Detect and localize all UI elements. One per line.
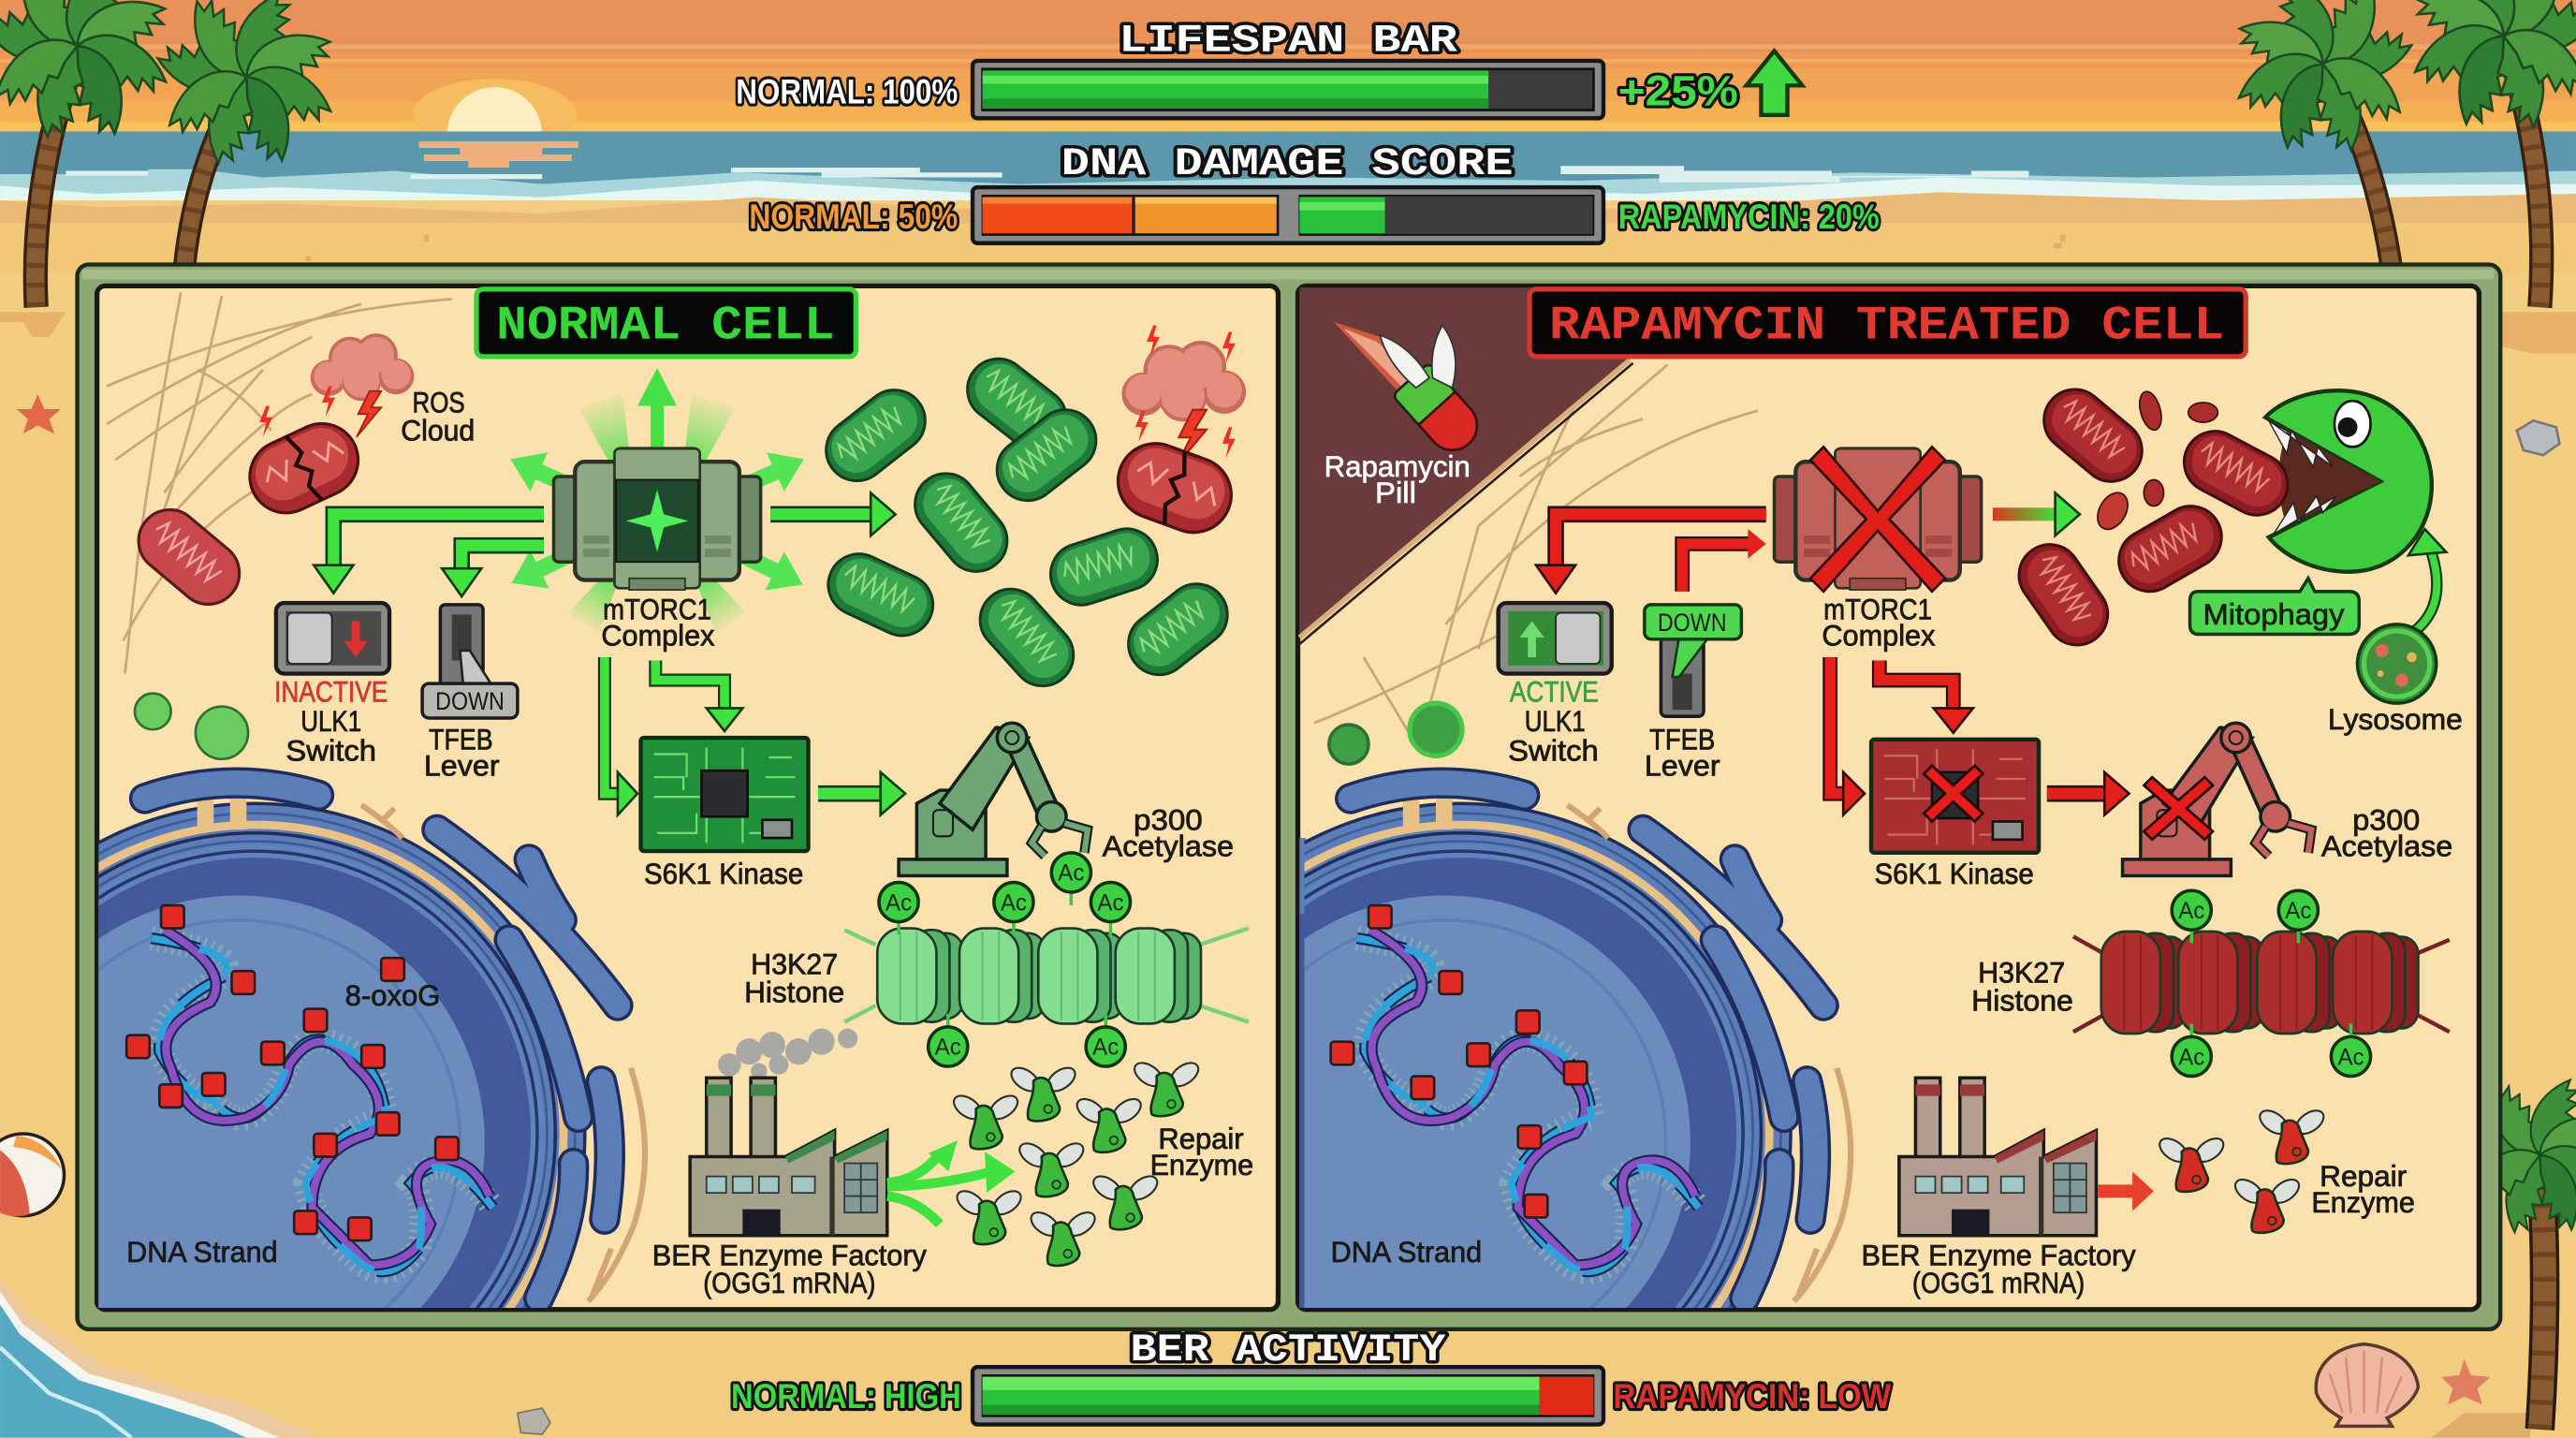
ULK1 switch inactive bbox=[276, 603, 389, 674]
repair enzyme label left: Enzyme bbox=[1150, 1148, 1253, 1181]
acetyl tags left bbox=[879, 853, 1131, 1066]
panel: normal cell bbox=[0, 286, 1278, 1438]
acetyl tags right bbox=[2172, 890, 2371, 1077]
ULK1 label right: ULK1 bbox=[1525, 704, 1586, 738]
ULK1 label left bbox=[274, 674, 388, 768]
ULK1 label right: ACTIVE bbox=[1510, 674, 1599, 708]
ULK1 label right bbox=[1508, 674, 1599, 768]
ULK1 switch active bbox=[1499, 603, 1612, 674]
HUD: lifespan bar bbox=[736, 18, 1802, 118]
factory smoke bbox=[718, 1029, 857, 1079]
palm tree right 2 bbox=[2407, 0, 2576, 307]
BER factory left bbox=[690, 1078, 887, 1236]
palm tree left 1 bbox=[0, 0, 175, 307]
ULK1 label left: Switch bbox=[285, 734, 376, 768]
BER gauge bbox=[973, 1367, 1603, 1425]
BER factory label right bbox=[1862, 1238, 2136, 1299]
damage gauge bbox=[973, 187, 1603, 243]
histone label left: Histone bbox=[744, 976, 844, 1009]
mitophagy pacman bbox=[2265, 390, 2432, 572]
palm tree bottom right bbox=[2456, 1072, 2576, 1430]
title: rapamycin treated cell: RAPAMYCIN TREATED CELL bbox=[1549, 301, 2224, 354]
lysosome blobs right bbox=[1329, 703, 1462, 764]
fibres right bbox=[1314, 365, 1758, 740]
rapamycin corner wedge bbox=[1299, 287, 1643, 644]
rapamycin pill label: Rapamycin bbox=[1325, 449, 1471, 483]
nucleus left bbox=[0, 783, 645, 1438]
arrow up bbox=[1747, 51, 1802, 115]
DNA strand label right: DNA Strand bbox=[1331, 1235, 1482, 1269]
TFEB label left bbox=[424, 722, 500, 782]
TFEB lever left bbox=[422, 605, 518, 718]
mTORC1 label left bbox=[601, 593, 715, 653]
title: normal cell bbox=[476, 289, 856, 357]
panel: rapamycin treated cell bbox=[1129, 286, 2479, 1438]
broken mitochondrion left bbox=[238, 412, 370, 525]
histone label right: Histone bbox=[1971, 983, 2073, 1017]
ULK1 label left: ULK1 bbox=[300, 704, 361, 738]
S6K1 label right: S6K1 Kinase bbox=[1875, 857, 2034, 890]
title: rapamycin treated cell bbox=[1530, 289, 2246, 357]
p300 label left: p300 bbox=[1134, 802, 1203, 836]
repair enzyme label right bbox=[2311, 1159, 2415, 1219]
histone left bbox=[844, 929, 1249, 1023]
BER normal label: NORMAL: HIGH bbox=[731, 1377, 961, 1416]
factory output arrows left bbox=[887, 1142, 1014, 1224]
heading: DNA damage score: DNA DAMAGE SCORE bbox=[1061, 141, 1513, 186]
outer frame bbox=[78, 265, 2500, 1329]
seashell bbox=[2316, 1344, 2418, 1426]
arrow to ULK1 bbox=[314, 514, 544, 594]
mixed arrow to mitochondria bbox=[1993, 493, 2080, 536]
histone label right bbox=[1971, 956, 2073, 1017]
rapamycin pill label bbox=[1325, 449, 1471, 509]
repair enzyme label right: Enzyme bbox=[2311, 1185, 2415, 1219]
S6K1 kinase active bbox=[641, 738, 809, 851]
S6K1 kinase inhibited bbox=[1871, 740, 2039, 853]
damage rapamycin label: RAPAMYCIN: 20% bbox=[1618, 198, 1880, 236]
palm tree left 2 bbox=[154, 0, 339, 271]
BER factory label left bbox=[652, 1238, 927, 1299]
p300 label right: Acetylase bbox=[2321, 829, 2452, 862]
mTORC1 label right: Complex bbox=[1822, 619, 1936, 653]
red arrow to S6K1 long bbox=[1830, 657, 1865, 814]
arrow to mitochondria bbox=[770, 493, 896, 536]
mTORC1 label right: mTORC1 bbox=[1823, 593, 1932, 626]
p300 label right: p300 bbox=[2352, 802, 2420, 836]
TFEB lever left: DOWN bbox=[435, 686, 505, 715]
lysosome blobs left bbox=[135, 694, 248, 759]
broken mitochondrion right bbox=[1107, 433, 1242, 543]
healthy mitochondria cluster bbox=[813, 346, 1239, 698]
starfish left bbox=[17, 394, 61, 433]
TFEB lever right: DOWN bbox=[1658, 608, 1727, 637]
S6K1 label left: S6K1 Kinase bbox=[644, 857, 803, 890]
arrow lysosome to pacman bbox=[2408, 529, 2446, 631]
histone label right: H3K27 bbox=[1978, 956, 2065, 990]
damage normal label: NORMAL: 50% bbox=[749, 198, 958, 236]
BER factory label left: (OGG1 mRNA) bbox=[703, 1266, 875, 1299]
lifespan gain: +25% bbox=[1618, 66, 1738, 114]
arrow mTORC1 to S6K1 short bbox=[655, 661, 742, 731]
rapamycin pill bbox=[1334, 322, 1487, 461]
p300 label left: Acetylase bbox=[1103, 829, 1234, 862]
repair enzymes left bbox=[950, 1058, 1203, 1266]
TFEB lever right bbox=[1645, 605, 1741, 716]
TFEB label left: Lever bbox=[424, 748, 500, 782]
arrow mTORC1 to S6K1 long bbox=[605, 657, 637, 814]
mTORC1 complex active bbox=[554, 448, 761, 590]
DNA strand label: DNA Strand bbox=[126, 1235, 278, 1269]
TFEB label right: TFEB bbox=[1649, 722, 1715, 756]
histone label left: H3K27 bbox=[751, 947, 838, 981]
ROS cloud right bbox=[1121, 325, 1246, 465]
lifespan normal label: NORMAL: 100% bbox=[736, 73, 958, 111]
ROS cloud left bbox=[259, 333, 414, 437]
heading: lifespan bar: LIFESPAN BAR bbox=[1119, 18, 1458, 63]
BER rapamycin label: RAPAMYCIN: LOW bbox=[1613, 1377, 1891, 1416]
BER factory right bbox=[1899, 1078, 2096, 1236]
HUD: DNA damage score bbox=[749, 141, 1880, 243]
lysosome right bbox=[2358, 624, 2437, 703]
red arrow to S6K1 short bbox=[1880, 661, 1973, 733]
cytoskeleton fibres bbox=[107, 292, 452, 674]
DNA damage marks bbox=[126, 905, 459, 1240]
repair enzymes right bbox=[2156, 1106, 2328, 1233]
arrow to TFEB bbox=[442, 546, 544, 596]
rapamycin pill label: Pill bbox=[1375, 476, 1416, 509]
red mitochondrion bbox=[126, 497, 252, 617]
title: normal cell: NORMAL CELL bbox=[496, 301, 835, 354]
DNA damage marks right bbox=[1331, 905, 1587, 1217]
sky bbox=[0, 0, 2576, 131]
TFEB label right: Lever bbox=[1645, 748, 1720, 782]
repair enzyme label right: Repair bbox=[2320, 1159, 2407, 1193]
red arrow to p300 bbox=[2047, 772, 2130, 814]
histone right bbox=[2073, 932, 2450, 1034]
p300 robot arm inhibited bbox=[2123, 723, 2311, 875]
mTORC1 label left: Complex bbox=[601, 619, 715, 653]
TFEB label left: TFEB bbox=[429, 722, 493, 756]
heading: BER activity: BER ACTIVITY bbox=[1131, 1328, 1446, 1372]
ROS cloud label: Cloud bbox=[401, 413, 475, 447]
mTORC1 inhibited bbox=[1774, 447, 1982, 592]
p300 label right bbox=[2321, 802, 2452, 862]
mTORC1 label right bbox=[1822, 593, 1936, 653]
8-oxoG label: 8-oxoG bbox=[345, 978, 440, 1012]
ROS cloud label bbox=[401, 386, 475, 447]
lifespan gauge bbox=[973, 61, 1603, 118]
beach ball bbox=[0, 1134, 65, 1216]
dying mitochondria bbox=[2007, 377, 2298, 657]
BER factory label left: BER Enzyme Factory bbox=[652, 1238, 927, 1271]
red arrow TFEB to mTORC1 bbox=[1682, 529, 1766, 592]
BER factory label right: BER Enzyme Factory bbox=[1862, 1238, 2136, 1271]
mTORC1 label left: mTORC1 bbox=[603, 593, 711, 626]
red arrow to ULK1 bbox=[1536, 514, 1766, 594]
starfish right bbox=[2441, 1358, 2491, 1405]
mitophagy tag bbox=[2190, 579, 2359, 634]
repair enzyme label left bbox=[1150, 1122, 1253, 1181]
factory output arrow right bbox=[2098, 1171, 2154, 1211]
arrow to p300 bbox=[818, 772, 905, 814]
ULK1 label left: INACTIVE bbox=[274, 674, 388, 708]
repair enzyme label left: Repair bbox=[1158, 1122, 1244, 1155]
TFEB label right bbox=[1645, 722, 1720, 782]
rock bottom bbox=[518, 1408, 550, 1434]
p300 label left bbox=[1103, 802, 1234, 862]
lysosome label: Lysosome bbox=[2328, 702, 2463, 736]
sun bbox=[413, 79, 577, 183]
sea bbox=[0, 131, 2576, 205]
mTORC1 activity rays bbox=[502, 368, 812, 633]
ROS cloud label: ROS bbox=[413, 386, 465, 419]
sea water corner bbox=[0, 1278, 320, 1438]
rock right bbox=[2517, 420, 2559, 455]
mitophagy tag: Mitophagy bbox=[2203, 597, 2345, 631]
palm tree right 1 bbox=[2231, 0, 2416, 271]
ULK1 label right: Switch bbox=[1508, 734, 1599, 768]
HUD: BER activity bbox=[731, 1328, 1891, 1425]
p300 robot arm active bbox=[899, 723, 1088, 875]
BER factory label right: (OGG1 mRNA) bbox=[1912, 1266, 2085, 1299]
nucleus right bbox=[1129, 783, 1851, 1438]
histone label left bbox=[744, 947, 844, 1009]
